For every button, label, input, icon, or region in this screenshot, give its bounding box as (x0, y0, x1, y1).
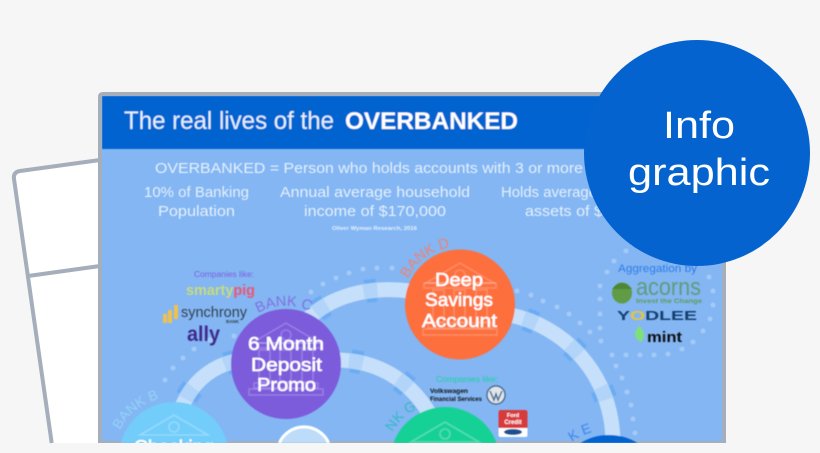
bank e: K E (568, 423, 592, 442)
definition and stats: Population (158, 203, 235, 220)
logo: yodlee: Y O DLEE (617, 309, 697, 323)
panel body (100, 94, 724, 443)
logo: ally: ally (187, 323, 220, 346)
definition and stats: Oliver Wyman Research, 2016 (332, 226, 417, 232)
logo: mint leaf (635, 326, 644, 342)
dotted trails (162, 248, 716, 436)
companies: aggregators: Aggregation by (618, 263, 698, 275)
logo: vw badge (487, 386, 505, 404)
bank d: deep savings account: Deep (435, 269, 483, 290)
logo: acorn icon (612, 282, 632, 304)
bank c: 6 month deposit promo: 6 Month (248, 333, 324, 354)
bank b: checking: BANK B (112, 390, 158, 429)
definition and stats: OVERBANKED = Person who holds accounts with 3 or more (155, 160, 583, 177)
bank d: deep savings account: BANK D (400, 238, 449, 278)
definition and stats: assets of $ (525, 203, 604, 220)
definition and stats: income of $170,000 (304, 203, 446, 220)
companies: purple group: Companies like: (194, 270, 254, 279)
definition and stats: Holds average (501, 184, 597, 201)
infographic panel (98, 40, 810, 443)
bank g (384, 402, 497, 443)
bank c: 6 month deposit promo: Promo (257, 374, 316, 395)
panel content (102, 96, 716, 443)
logo: ford credit: Credit (504, 420, 522, 426)
title: OVERBANKED (345, 108, 518, 135)
badge text: Info (663, 105, 735, 147)
info badge (584, 40, 810, 266)
bank e (568, 423, 638, 443)
logo: mint: mint (647, 329, 682, 346)
logo: smartypig: smartypig (186, 282, 255, 299)
companies: aggregators (612, 263, 702, 346)
badge text (628, 105, 770, 194)
logo: synchrony: synchrony (181, 304, 247, 321)
title (124, 110, 518, 130)
logo: acorns: acorns (636, 274, 701, 301)
companies: green group (430, 375, 528, 437)
logo: acorns tagline: Invest the Change (636, 298, 702, 305)
logo: volkswagen text (430, 388, 482, 403)
definition and stats: 10% of Banking (144, 184, 249, 201)
definition and stats (144, 160, 604, 232)
companies: green group: Companies like: (436, 375, 498, 384)
badge text: graphic (628, 152, 770, 194)
logo: ford credit (498, 410, 528, 437)
white ring circle (279, 427, 329, 443)
companies: purple group (163, 270, 255, 346)
bank c: 6 month deposit promo: BANK C (254, 295, 312, 313)
bank d: deep savings account: Account (422, 310, 497, 331)
bank g: NK G (384, 402, 416, 432)
logo: ford credit: Ford (507, 413, 519, 419)
logo: volkswagen text: Volkswagen (430, 388, 468, 395)
title: The real lives of the (124, 107, 334, 135)
logo: volkswagen text: Financial Services (430, 396, 482, 403)
bank b: checking (112, 390, 228, 443)
header band (102, 96, 600, 150)
curved path between banks (180, 290, 613, 442)
definition and stats: Annual average household (280, 184, 470, 201)
logo: synchrony bank: BANK (226, 319, 240, 324)
bank c: 6 month deposit promo (230, 295, 342, 420)
logo: synchrony bars (163, 305, 178, 323)
bank c: 6 month deposit promo: Deposit (251, 354, 322, 375)
back sheet of paper (14, 160, 100, 443)
bank d: deep savings account (400, 238, 516, 360)
bank d: deep savings account: Savings (425, 289, 493, 310)
